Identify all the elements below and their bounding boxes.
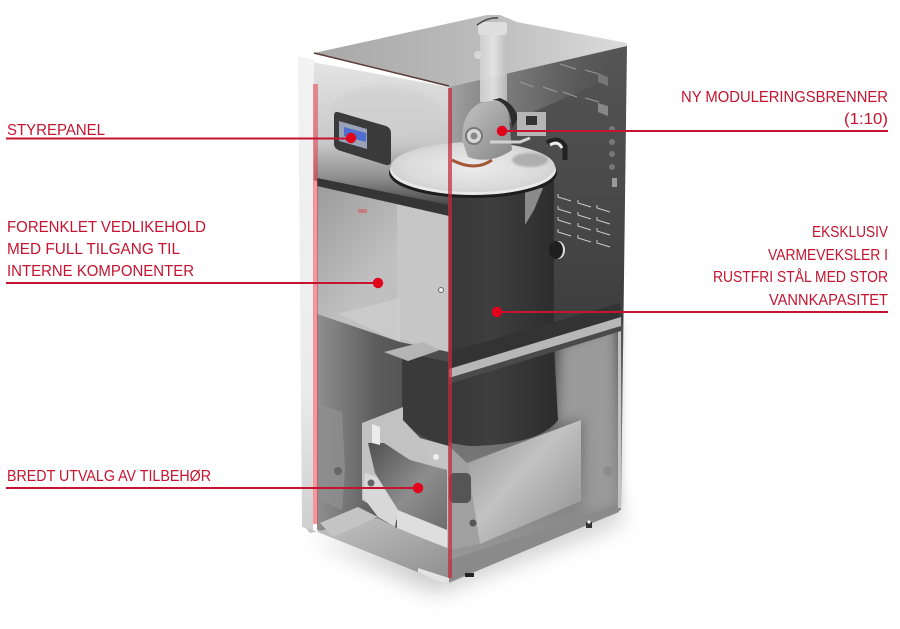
callout: varmeveksler: VARMEVEKSLER I: [768, 247, 888, 264]
feet: [465, 520, 592, 577]
top cover: [314, 15, 627, 87]
callout: moduleringsbrenner: NY MODULERINGSBRENNER: [681, 89, 888, 106]
callout: forenklet vedlikehold: MED FULL TILGANG TIL: [7, 241, 180, 258]
red cut edges: [313, 53, 452, 578]
callout: varmeveksler: VANNKAPASITET: [769, 292, 888, 309]
flue pipe: [474, 18, 507, 102]
callout: moduleringsbrenner: [497, 89, 888, 136]
heat exchanger cylinder upper: [392, 180, 565, 446]
callout: styrepanel: STYREPANEL: [7, 122, 105, 139]
left side glass panel: [312, 62, 449, 210]
callout: forenklet vedlikehold: INTERNE KOMPONENTER: [7, 263, 194, 280]
front foot bracket: [320, 507, 449, 582]
callout: styrepanel: [6, 122, 356, 143]
burner lid: [389, 142, 557, 198]
control panel: [334, 112, 391, 165]
callout: forenklet vedlikehold: FORENKLET VEDLIKEHOLD: [7, 219, 206, 236]
rear interior panel: [449, 45, 627, 583]
lower bracket assembly: [320, 405, 449, 550]
callout: bredt utvalg av tilbehor: [6, 468, 423, 493]
lower left compartment: [317, 312, 449, 580]
lower right box: [449, 420, 613, 550]
callout: varmeveksler: EKSKLUSIV: [812, 224, 889, 241]
left service panel: [317, 178, 449, 361]
modulating burner: [462, 98, 565, 160]
front rail: [449, 505, 619, 582]
boiler cutaway illustration: [298, 15, 627, 583]
glass highlight: [330, 86, 440, 138]
base floor: [305, 518, 449, 581]
floor shadow: [308, 500, 620, 592]
shelf: [449, 303, 621, 384]
callout: bredt utvalg av tilbehor: BREDT UTVALG AV TILBEHØR: [7, 468, 211, 485]
callout: varmeveksler: [492, 224, 889, 317]
ventilation slots: [558, 194, 610, 247]
callout: forenklet vedlikehold: [6, 219, 383, 288]
callout: moduleringsbrenner: (1:10): [844, 111, 888, 128]
cylinder lower left: [402, 352, 449, 446]
outer glass edge: [298, 56, 314, 530]
